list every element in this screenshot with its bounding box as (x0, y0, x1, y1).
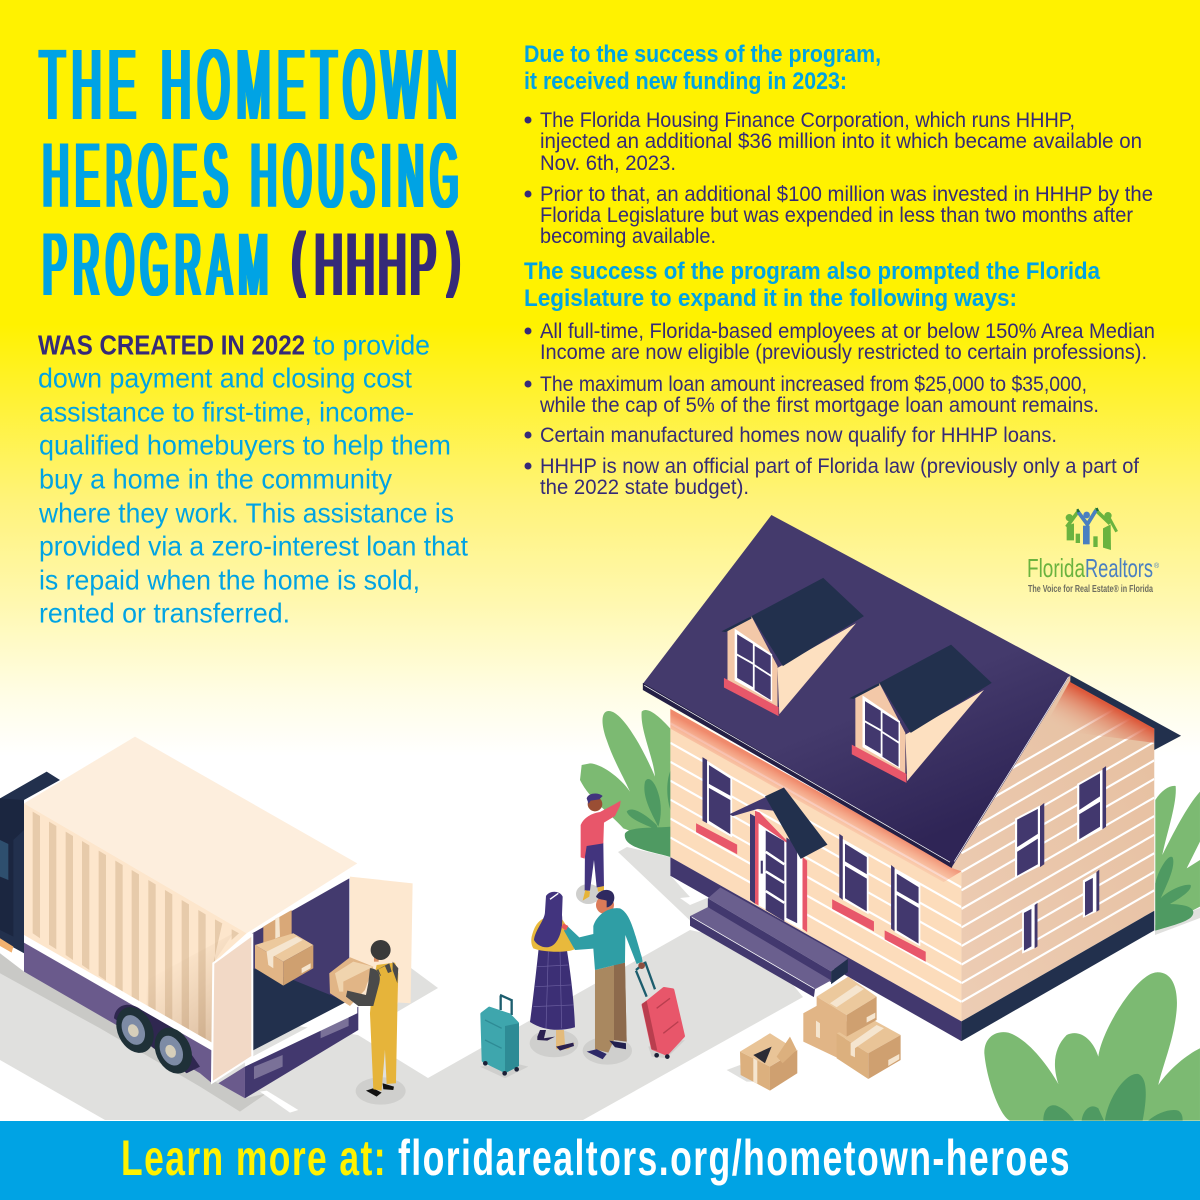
expansion bullets: Certain manufactured homes now qualify for HHHP loans. (540, 423, 1057, 447)
dormer left (721, 578, 864, 716)
logo: Florida Realtors: The Voice for Real Estate® in Florida (1028, 584, 1153, 595)
title: ) (447, 219, 460, 299)
roof (643, 515, 1181, 868)
logo: Florida Realtors (1027, 508, 1160, 595)
intro paragraph: buy a home in the community (39, 464, 392, 494)
title: ( (292, 219, 305, 299)
expansion bullets: Income are now eligible (previously restricted to certain professions). (540, 340, 1147, 364)
man with blue shirt (561, 890, 643, 1059)
intro paragraph: rented or transferred. (39, 598, 290, 628)
heading: program expansion (524, 258, 1101, 312)
road and walkway (0, 847, 1200, 1120)
chassis (24, 935, 212, 1083)
teal suitcase (482, 995, 519, 1076)
intro paragraph: assistance to first-time, income- (39, 396, 414, 428)
footer banner (0, 1121, 1200, 1200)
truck cab (0, 772, 60, 953)
funding bullets: The Florida Housing Finance Corporation, which runs HHHP, (540, 108, 1075, 132)
expansion bullets: The maximum loan amount increased from $25,000 to $35,000, (540, 372, 1087, 396)
man waving (576, 793, 621, 904)
text: HEROES HOUSING (43, 125, 465, 227)
shadows (480, 1029, 685, 1078)
expansion bullets (524, 319, 1155, 499)
funding bullets: becoming available. (540, 224, 716, 248)
logo: Florida Realtors: ® (1154, 562, 1160, 570)
plant foreground (984, 972, 1200, 1121)
heading: program expansion: The success of the program also prompted the Florida (524, 258, 1101, 285)
cargo interior (245, 878, 357, 1067)
title: PROGRAM (43, 214, 275, 314)
foundation (670, 857, 1154, 1041)
expansion bullets: while the cap of 5% of the first mortgage loan amount remains. (539, 393, 1099, 417)
expansion bullets: the 2022 state budget). (540, 475, 749, 499)
intro paragraph (38, 330, 468, 628)
woman (530, 892, 575, 1051)
funding bullets: Florida Legislature but was expended in less than two months after (540, 203, 1133, 227)
title: HHHP (315, 214, 440, 314)
rear bumper (218, 1007, 358, 1098)
front windows (696, 757, 926, 962)
intro paragraph: WAS CREATED IN 2022 (38, 330, 305, 360)
heading: new funding: it received new funding in 2023: (524, 68, 847, 95)
footer banner: Learn more at: (121, 1130, 387, 1186)
intro paragraph: to provide (313, 330, 430, 360)
open cardboard box (727, 1033, 797, 1091)
right open door (350, 877, 413, 1003)
intro paragraph: provided via a zero-interest loan that (39, 530, 468, 562)
house (643, 515, 1181, 1041)
left open door (212, 935, 252, 1083)
expansion bullets: All full-time, Florida-based employees at or below 150% Area Median (540, 319, 1155, 343)
cargo side wall with ribs (24, 803, 247, 1050)
front door (729, 787, 827, 932)
cardboard boxes near house (803, 977, 901, 1079)
boxes in truck (255, 910, 313, 986)
red suitcase (636, 962, 683, 1059)
text: THE HOMETOWN (40, 29, 464, 141)
logo: Florida Realtors: Florida (1027, 553, 1085, 583)
cargo roof (24, 737, 357, 933)
couple with luggage (480, 890, 685, 1078)
heading: new funding (524, 41, 881, 95)
heading: program expansion: Legislature to expand it in the following ways: (524, 285, 1017, 312)
plant behind house, left (580, 710, 672, 857)
side wall (951, 675, 1154, 1021)
heading: new funding: Due to the success of the program, (524, 41, 881, 68)
intro paragraph: is repaid when the home is sold, (39, 564, 420, 596)
intro paragraph: qualified homebuyers to help them (39, 430, 451, 460)
front steps (690, 887, 848, 997)
dormer right (849, 645, 992, 783)
road marking (260, 1091, 298, 1113)
title (40, 29, 465, 314)
funding bullets: Prior to that, an additional $100 million was invested in HHHP by the (540, 182, 1153, 206)
moving truck (0, 737, 413, 1113)
truck shadow (0, 953, 267, 1112)
side windows (1015, 766, 1106, 954)
expansion bullets: HHHP is now an official part of Florida law (previously only a part of (540, 454, 1139, 478)
funding bullets (524, 108, 1153, 248)
wheels (109, 1001, 200, 1080)
front wall (670, 709, 961, 1021)
plant behind house, right (1155, 786, 1200, 931)
worker (329, 940, 406, 1105)
intro paragraph: down payment and closing cost (38, 362, 412, 394)
logo: Florida Realtors: Realtors (1085, 553, 1153, 583)
funding bullets: injected an additional $36 million into it which became available on (540, 129, 1142, 153)
funding bullets: Nov. 6th, 2023. (540, 151, 676, 175)
intro paragraph: where they work. This assistance is (38, 498, 454, 528)
